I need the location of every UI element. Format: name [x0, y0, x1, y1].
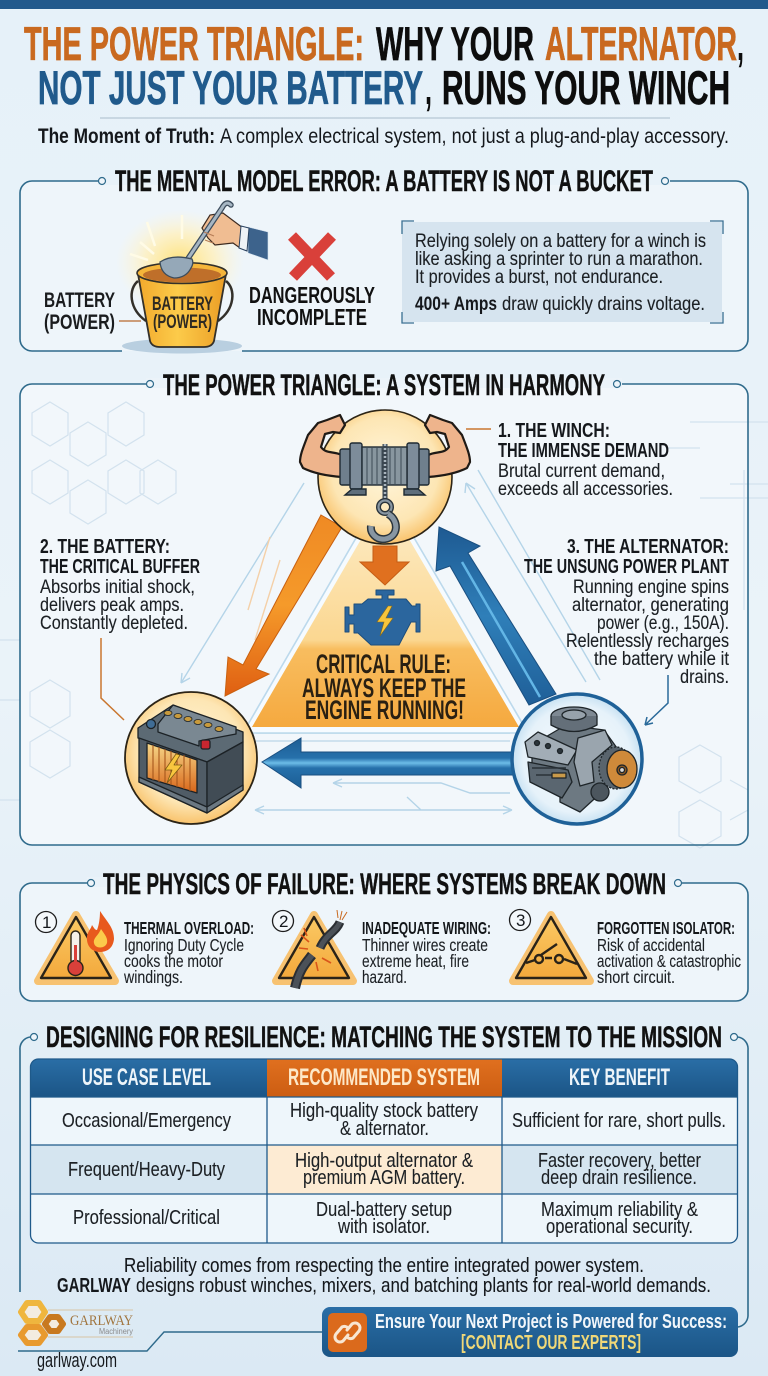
label: battery power: (POWER)	[44, 311, 115, 334]
text: the alternator: Running engine spins	[573, 577, 729, 598]
text: the alternator: drains.	[680, 667, 729, 688]
icon: burnt wire	[295, 910, 347, 988]
table row: professional: operational security.	[546, 1216, 693, 1238]
website: garlway.com	[37, 1350, 117, 1372]
text: the battery: delivers peak amps.	[40, 595, 184, 616]
item: thermal overload	[36, 911, 254, 987]
item: thermal overload: cooks the motor	[124, 951, 223, 971]
table row: professional: Maximum reliability &	[541, 1199, 699, 1221]
callout: sprinter analogy: It provides a burst, not endurance.	[415, 267, 663, 288]
table row: occasional	[62, 1100, 726, 1140]
item: inadequate wiring: 2	[279, 912, 288, 931]
call to action	[322, 1307, 738, 1357]
table row: frequent: Faster recovery, better	[538, 1150, 701, 1172]
text: the winch	[466, 419, 673, 500]
logo: garlway: Machinery	[99, 1327, 133, 1336]
table header: KEY BENEFIT	[569, 1064, 670, 1091]
table row: frequent: premium AGM battery.	[303, 1167, 465, 1189]
closing statement: Reliability comes from respecting the entire integrated power system.	[124, 1255, 644, 1277]
node: alternator engine	[512, 694, 642, 824]
panel: mental model error	[20, 165, 748, 354]
label: dangerously incomplete	[249, 282, 375, 330]
table row: occasional: Occasional/Emergency	[62, 1110, 231, 1132]
text: critical rule: CRITICAL RULE:	[316, 649, 451, 679]
item: forgotten isolator: 3	[516, 911, 525, 930]
text: the alternator: alternator, generating	[572, 595, 729, 616]
node: winch	[300, 410, 470, 544]
title: NOT JUST YOUR BATTERY	[38, 61, 423, 114]
item: forgotten isolator	[510, 910, 741, 987]
title	[24, 17, 744, 114]
item: inadequate wiring	[272, 910, 491, 988]
panel: designing for resilience	[18, 1021, 748, 1372]
text: the winch: 1. THE WINCH:	[498, 419, 610, 442]
text: the alternator: Relentlessly recharges	[566, 631, 729, 652]
title: ,	[425, 61, 432, 114]
table row: occasional: High-quality stock battery	[290, 1100, 478, 1122]
title: WHY YOUR	[376, 17, 534, 70]
table row: frequent	[68, 1150, 701, 1189]
arrow: winch down to engine	[360, 546, 409, 585]
icon: link	[328, 1313, 367, 1352]
subtitle	[38, 125, 729, 148]
call to action: [CONTACT OUR EXPERTS]	[461, 1332, 641, 1354]
table row: professional: Professional/Critical	[73, 1207, 220, 1229]
table row: frequent: deep drain resilience.	[541, 1167, 697, 1189]
arrow: alternator to battery	[262, 738, 514, 788]
table row: professional	[73, 1199, 699, 1238]
callout: sprinter analogy: Relying solely on a battery for a winch is	[415, 231, 706, 252]
text: the battery: THE CRITICAL BUFFER	[40, 555, 200, 578]
callout: sprinter analogy: draw quickly drains voltage.	[502, 294, 705, 315]
item: inadequate wiring: hazard.	[362, 967, 407, 987]
icon: hook	[371, 500, 396, 539]
table row: professional: with isolator.	[337, 1216, 430, 1238]
item: thermal overload: windings.	[123, 967, 183, 987]
icon: engine warning	[345, 590, 420, 645]
table header	[82, 1064, 670, 1091]
table header: RECOMMENDED SYSTEM	[288, 1064, 480, 1091]
item: forgotten isolator: short circuit.	[597, 967, 675, 987]
table header: USE CASE LEVEL	[82, 1064, 211, 1091]
node: battery	[125, 692, 257, 824]
text: the alternator	[524, 535, 730, 725]
closing statement: GARLWAY	[57, 1275, 131, 1297]
arrow: winch to battery	[225, 515, 342, 696]
label: battery power	[44, 289, 141, 334]
item: forgotten isolator: Risk of accidental	[597, 935, 705, 955]
text: critical rule	[302, 649, 466, 725]
icon: bucket and ladle: (POWER)	[153, 312, 212, 333]
text: the alternator: the battery while it	[594, 649, 730, 670]
item: inadequate wiring: Thinner wires create	[362, 935, 488, 955]
text: the alternator: power (e.g., 150A).	[597, 613, 729, 634]
table row: occasional: Sufficient for rare, short pulls.	[512, 1110, 726, 1132]
icon: red cross	[292, 236, 332, 277]
logo: garlway: GARLWAY	[70, 1313, 133, 1329]
table row: occasional: & alternator.	[340, 1118, 429, 1140]
title: ,	[737, 17, 744, 70]
panel: power triangle	[20, 369, 748, 845]
text: the battery: Constantly depleted.	[40, 613, 188, 634]
label: dangerously incomplete: DANGEROUSLY	[249, 282, 375, 308]
item: thermal overload: 1	[42, 913, 51, 932]
text: the battery	[40, 535, 200, 720]
icon: engine	[525, 707, 637, 812]
text: the winch: THE IMMENSE DEMAND	[498, 439, 669, 462]
title: THE POWER TRIANGLE:	[24, 17, 364, 70]
background hexagons and circuits	[0, 402, 768, 848]
callout: sprinter analogy: 400+ Amps	[415, 294, 497, 315]
title divider	[100, 118, 670, 119]
callout: sprinter analogy: like asking a sprinter to run a marathon.	[415, 249, 703, 270]
label: dangerously incomplete: INCOMPLETE	[257, 304, 367, 330]
text: critical rule: ENGINE RUNNING!	[305, 695, 464, 725]
text: the winch: exceeds all accessories.	[498, 479, 673, 500]
text: the battery: Absorbs initial shock,	[40, 577, 195, 598]
logo: garlway	[21, 1303, 133, 1343]
icon: car battery	[138, 705, 243, 813]
icon: thermometer	[68, 931, 83, 976]
icon: flexing arms	[300, 415, 470, 477]
icon: open switch	[526, 944, 577, 964]
table row: frequent: Frequent/Heavy-Duty	[68, 1159, 225, 1181]
subtitle: The Moment of Truth:	[38, 125, 215, 148]
icon: bucket and ladle	[116, 203, 268, 354]
icon: bucket and ladle: BATTERY	[152, 294, 213, 315]
text: critical rule: ALWAYS KEEP THE	[302, 673, 466, 703]
text: the battery: 2. THE BATTERY:	[40, 535, 170, 558]
item: thermal overload: THERMAL OVERLOAD:	[124, 918, 254, 938]
text: the winch: Brutal current demand,	[498, 461, 665, 482]
item: thermal overload: Ignoring Duty Cycle	[124, 935, 244, 955]
icon: flame	[87, 911, 114, 952]
arrow: alternator to winch	[436, 527, 556, 705]
triangle: critical rule	[243, 488, 528, 733]
panel: physics of failure	[20, 868, 748, 1001]
panel fill: power triangle	[20, 384, 748, 845]
item: inadequate wiring: extreme heat, fire	[362, 951, 469, 971]
icon: winch drum	[340, 443, 429, 500]
table: use case levels	[30, 1059, 738, 1243]
closing statement	[57, 1255, 711, 1297]
item: inadequate wiring: INADEQUATE WIRING:	[362, 918, 491, 938]
thin flow arrows	[181, 470, 600, 814]
table row: professional: Dual-battery setup	[316, 1199, 452, 1221]
label: battery power: BATTERY	[44, 289, 115, 312]
table row: frequent: High-output alternator &	[295, 1150, 474, 1172]
top bar	[0, 0, 768, 9]
callout: sprinter analogy	[402, 221, 723, 323]
